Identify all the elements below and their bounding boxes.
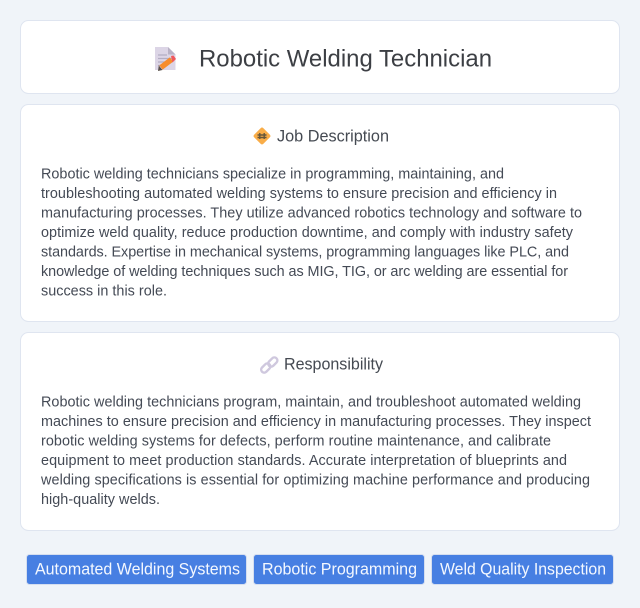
responsibility text: Robotic welding technicians program, maintain, and troubleshoot automated welding [41,394,581,410]
panel: title [20,20,620,94]
icon: document with pencil [155,47,176,71]
job description text [41,166,582,300]
responsibility text [40,394,591,508]
panel: job description [20,104,620,322]
tag: weld quality inspection [432,554,614,584]
job description text: success in this role. [41,284,167,300]
responsibility text: machines to ensure precision and efficiency in manufacturing processes. They inspect [41,414,591,430]
tag: automated welding systems [26,554,246,584]
panel: responsibility [20,332,620,530]
job description text: standards. Expertise in mechanical systems, programming languages like PLC, and [41,244,569,260]
tag: robotic programming [254,554,424,584]
job description text: optimize weld quality, reduce production downtime, and comply with industry safety [41,225,574,241]
heading: responsibility: Responsibility [284,356,384,374]
tag: weld quality inspection: Weld Quality Inspection [440,560,606,578]
responsibility text: welding specifications is essential for optimizing machine performance and producing [40,472,590,488]
responsibility text: high-quality welds. [41,492,160,508]
job description text: manufacturing processes. They utilize advanced robotics technology and software to [41,206,582,222]
responsibility text: equipment to meet production standards. Accurate interpretation of blueprints and [41,453,567,469]
heading: job description: Job Description [277,128,389,146]
job description text: Robotic welding technicians specialize in programming, maintaining, and [41,166,504,182]
tag: robotic programming: Robotic Programming [262,560,417,578]
icon: orange diamond [253,127,271,145]
job description text: knowledge of welding techniques such as MIG, TIG, or arc welding are essential for [41,264,568,280]
title text: Robotic Welding Technician [199,46,492,72]
icon: chain link [260,356,279,374]
tag: automated welding systems: Automated Welding Systems [35,560,240,578]
job description text: troubleshooting automated welding systems to ensure precision and efficiency in [41,186,557,202]
responsibility text: robotic welding systems for defects, perform routine maintenance, and calibrate [41,434,551,450]
